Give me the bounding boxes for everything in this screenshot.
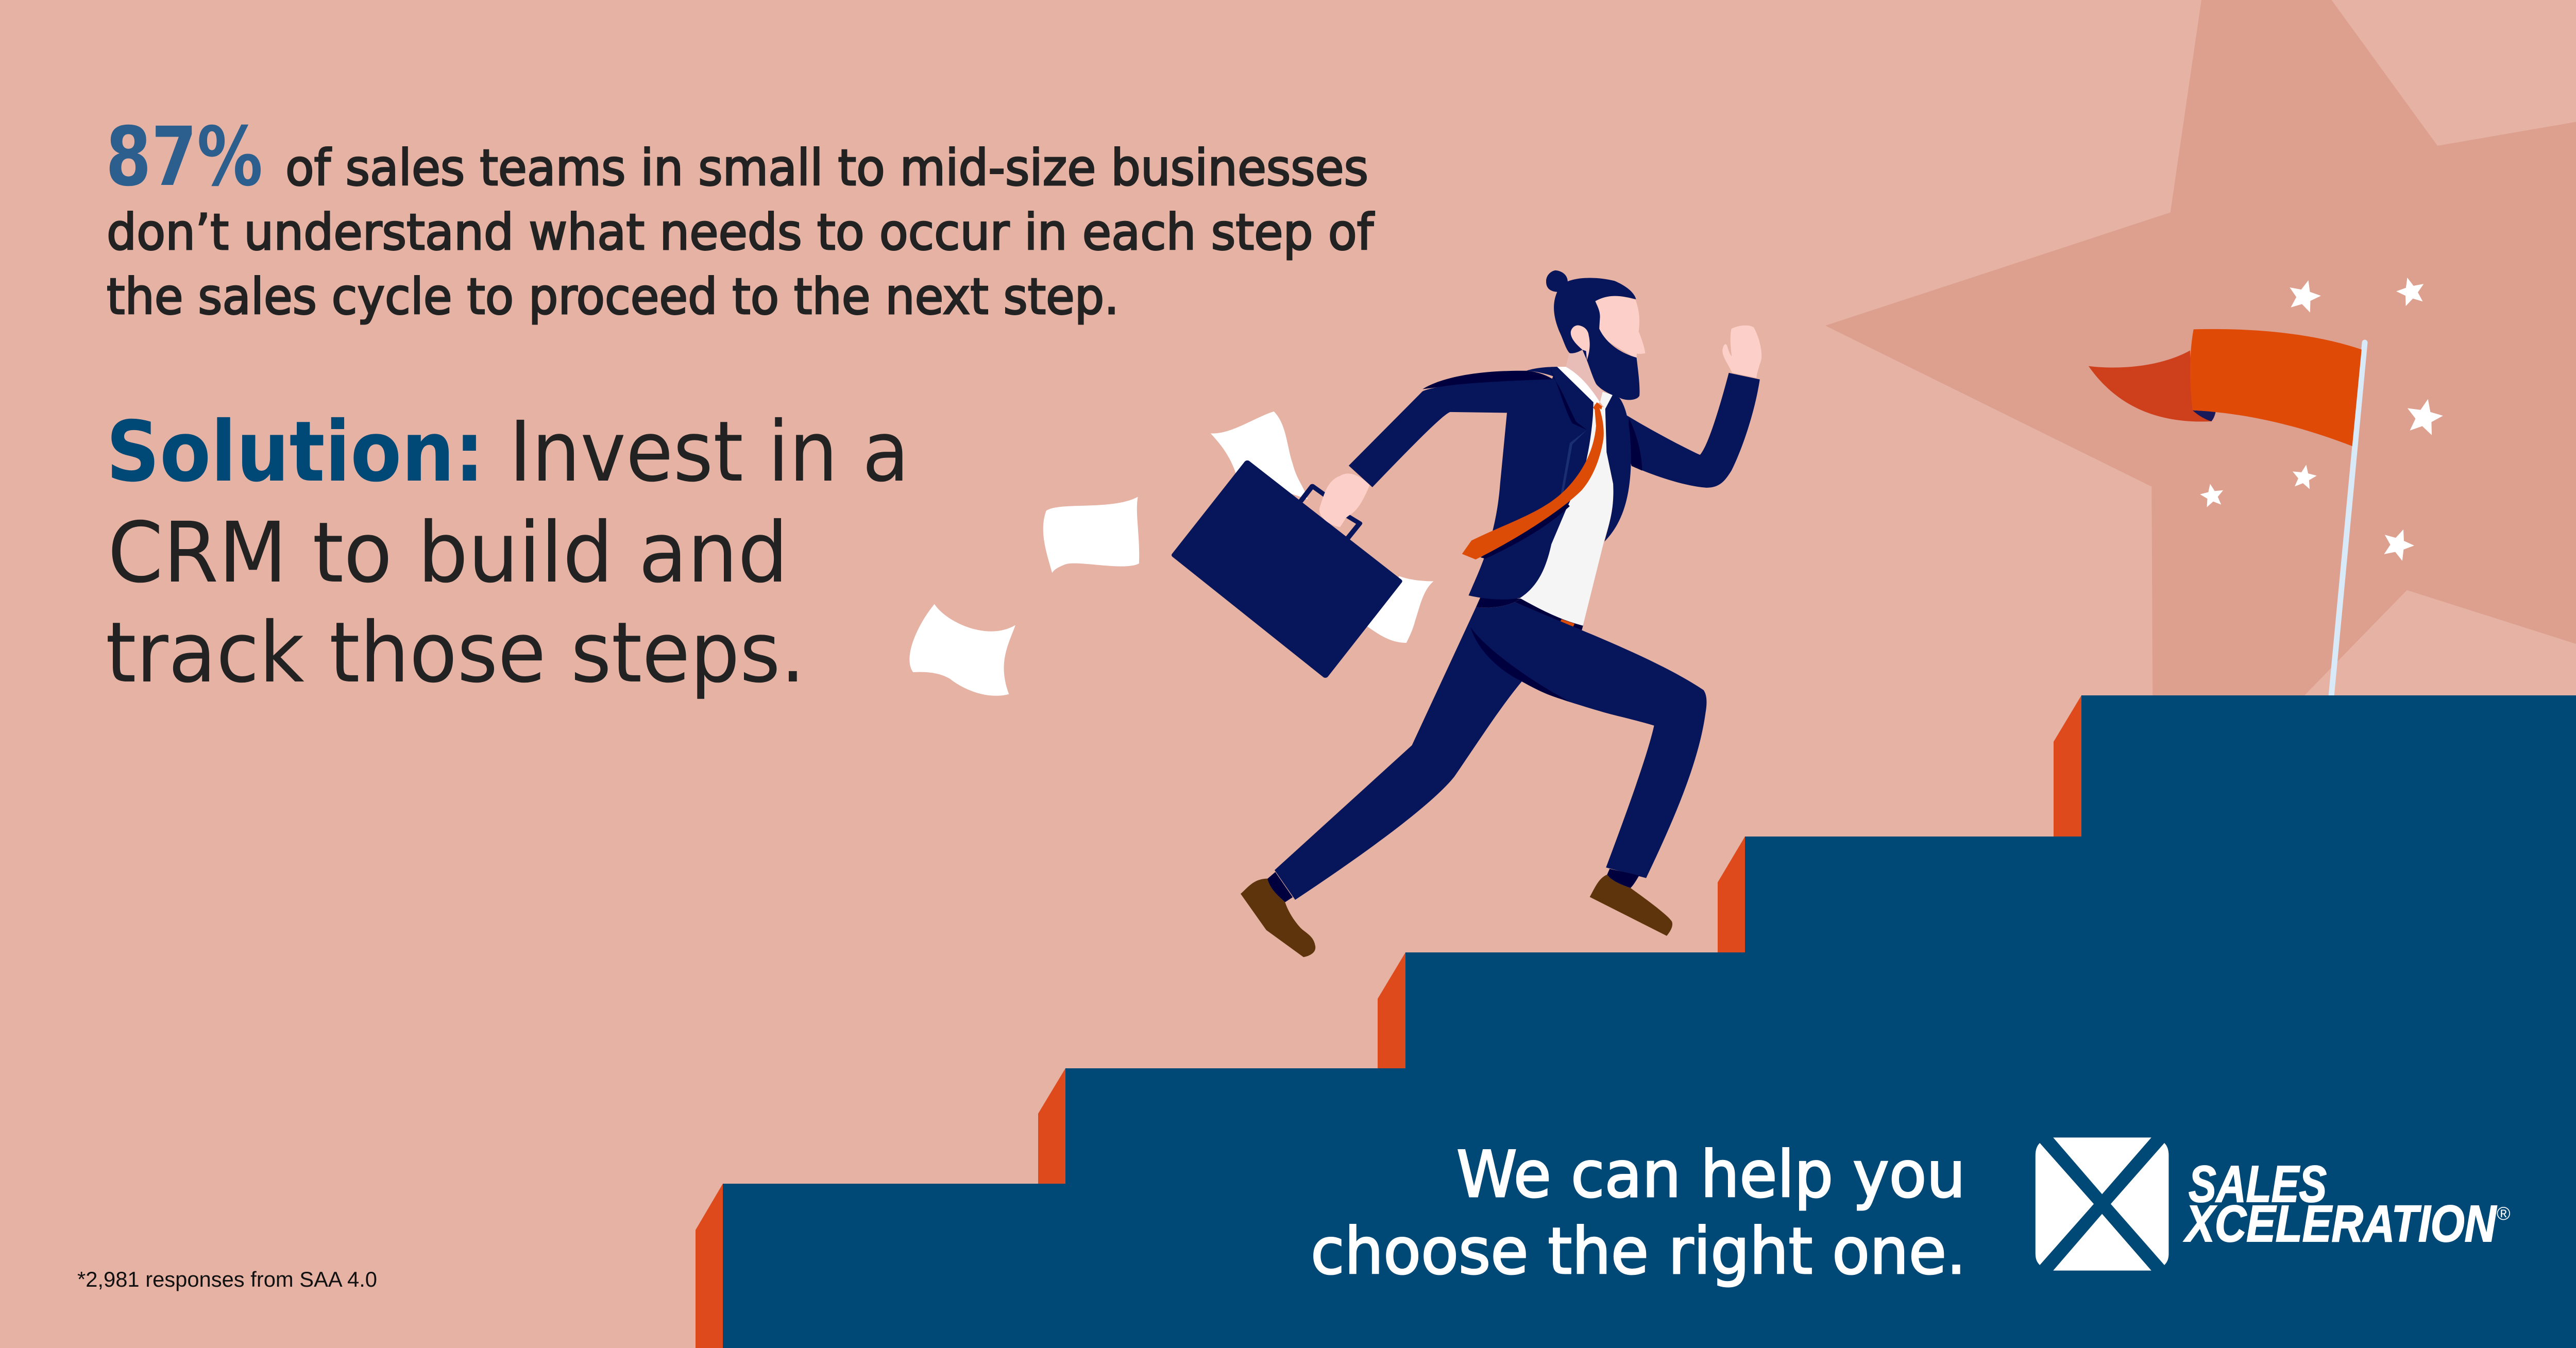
flying papers [909, 412, 1434, 696]
flag pole [2331, 343, 2365, 696]
solution line 2: CRM to build and [108, 505, 788, 602]
call to action: We can help you [1456, 1138, 1965, 1212]
call to action: choose the right one. [1311, 1215, 1966, 1289]
logo wordmark: XCELERATION [2183, 1195, 2497, 1253]
legs [1241, 598, 1706, 957]
call to action [1311, 1138, 1966, 1289]
briefcase and hand [1175, 463, 1399, 675]
statistic line 1: of sales teams in small to mid-size businesses [285, 139, 1368, 197]
stars around flag [2198, 274, 2446, 563]
step 5 riser [2054, 695, 2081, 845]
solution label: Solution: [106, 404, 484, 501]
step 3 riser [1378, 952, 1405, 1077]
statistic line 3: the sales cycle to proceed to the next step. [107, 268, 1119, 326]
footnote: *2,981 responses from SAA 4.0 [77, 1267, 377, 1291]
logo: Sales Xceleration [2036, 1137, 2511, 1271]
step 1 riser [696, 1184, 723, 1348]
step 2 riser [1038, 1068, 1065, 1190]
logo wordmark: SALES [2189, 1155, 2327, 1213]
logo mark [2036, 1137, 2168, 1271]
statistic line 2: don’t understand what needs to occur in each step of [107, 203, 1375, 261]
steps [723, 695, 2576, 1348]
staircase [696, 695, 2576, 1348]
solution line 3: track those steps. [106, 605, 805, 702]
flag [2089, 329, 2365, 696]
running businessman [1241, 270, 1761, 957]
87% figure: 87% [106, 110, 263, 204]
solution text [106, 404, 909, 702]
solution line 1: Invest in a [509, 404, 909, 501]
logo wordmark [2183, 1155, 2511, 1253]
flag cloth [2089, 329, 2362, 446]
background star [1825, 0, 2576, 695]
step 4 riser [1718, 837, 1745, 958]
statistic text [106, 110, 1375, 326]
torso, arms and head [1349, 270, 1761, 626]
logo wordmark: ® [2497, 1203, 2511, 1224]
